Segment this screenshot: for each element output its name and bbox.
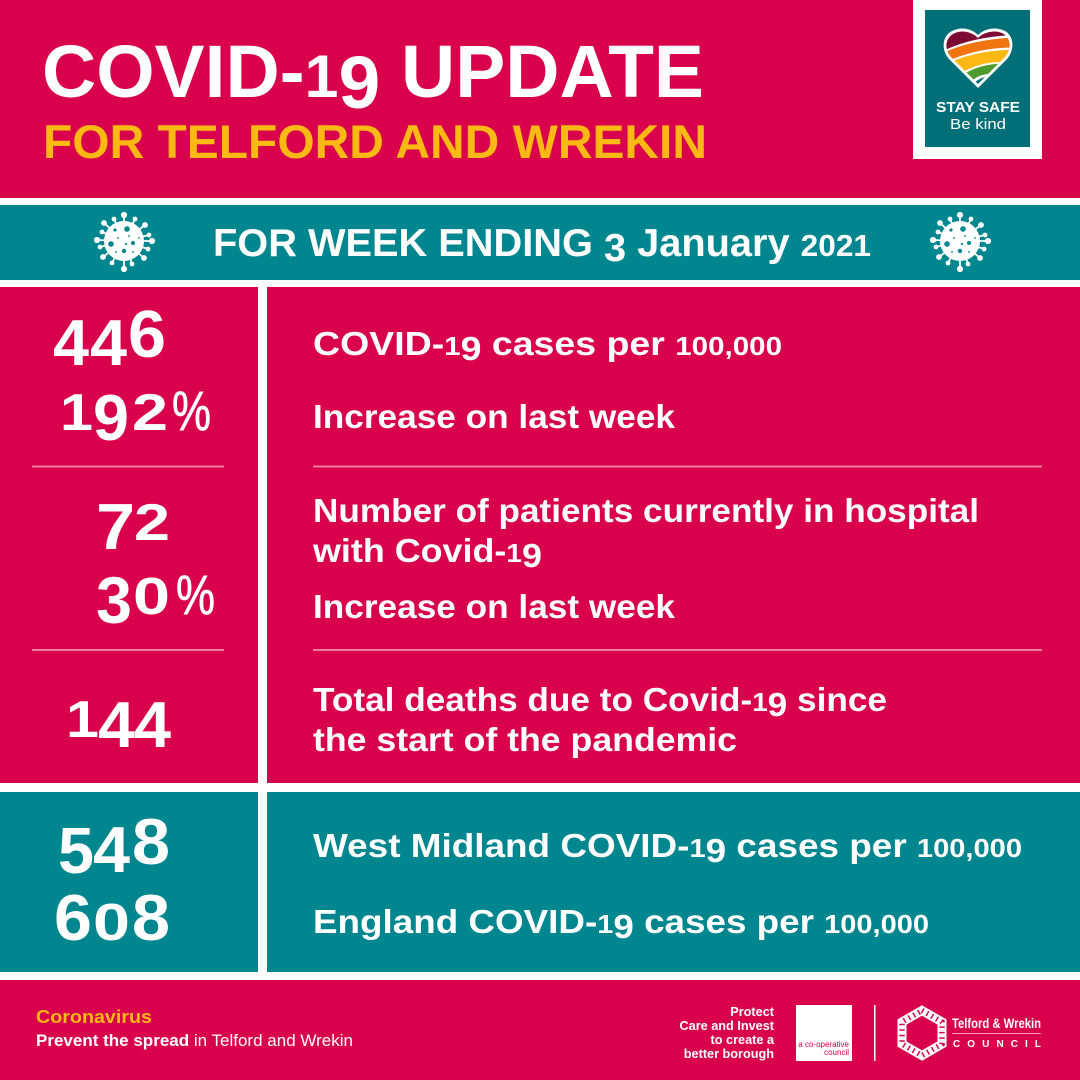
panel: week ending banner [0,205,1080,280]
label: patients in hospital: Number of patients currently in hospital [313,492,979,529]
number: 144 [66,688,171,761]
number: 446: 6 [128,297,166,372]
footer heading: coronavirus: Coronavirus [36,1007,152,1027]
icon: virus right [931,213,990,271]
number: 192%: 2 [132,384,168,442]
council name: Telford & Wrekin [952,1015,1041,1031]
label: increase on last week: Increase on last week [313,398,676,435]
icon: council hexagon [902,1010,942,1056]
panel: local figures, descriptions column [267,287,1080,783]
number: 30%: 3 [96,563,132,637]
label: west midland cases: West Midland COVID- 19 cases per 100,000 [313,827,1022,869]
label: england cases: England COVID- 19 cases per 100,000 [313,903,929,945]
number: 30%: % [176,563,215,626]
number: 192%: 9 [93,381,129,454]
number: 30%: 0 [133,568,170,626]
number: 608: 6 [54,881,92,954]
panel: header [0,0,1080,198]
footer text: prevent the spread: Prevent the spread in Telford and Wrekin [36,1032,353,1050]
label: total deaths line 1: Total deaths due to Covid- 19 since [313,681,887,723]
number: 548: 8 [132,805,170,878]
co-operative council badge: council [824,1048,849,1057]
number: 608: 8 [132,881,170,954]
number: 192%: % [172,379,211,442]
logo text: be kind: Be kind [950,116,1006,133]
panel: footer [0,980,1080,1080]
panel: comparison, descriptions column [267,792,1080,972]
logo: stay safe be kind [913,0,1042,159]
number: 144: 4 [98,688,135,761]
telford and wrekin council logo [902,1010,1041,1056]
number: 446 [53,297,166,379]
number: 446: 4 [90,306,127,379]
number: 548 [58,805,170,887]
number: 30% [96,563,215,637]
number: 192%: 1 [60,384,93,442]
co-operative council badge [796,1005,852,1061]
council word: COUNCIL [953,1039,1041,1050]
number: 608: 0 [93,894,130,952]
number: 192% [60,379,211,454]
logo text: stay safe: STAY SAFE [936,99,1020,116]
number: 72 [96,490,170,563]
icon: virus left [95,213,154,271]
number: 144: 1 [66,691,99,749]
panel: local figures, numbers column [0,287,258,783]
footer strapline: better borough [684,1047,774,1061]
subtitle: FOR TELFORD AND WREKIN [43,115,707,168]
co-operative council badge: a co-operative [798,1040,850,1049]
title: COVID-19 UPDATE [42,30,704,124]
number: 446: 4 [53,306,89,379]
number: 144: 4 [134,688,171,761]
footer strapline: Protect [730,1005,775,1019]
number: 608 [54,881,170,954]
label: with covid-19: with Covid- 19 [312,532,542,574]
footer strapline: to create a [711,1033,775,1047]
number: 72: 2 [134,494,170,552]
icon: rainbow heart [944,28,1012,88]
label: cases per 100,000: COVID- 19 cases per 100,000 [313,325,782,367]
week ending heading: FOR WEEK ENDING 3 January 2021 [213,222,871,270]
footer strapline: Care and Invest [680,1019,775,1033]
footer strapline [680,1005,775,1061]
panel: comparison, numbers column [0,792,258,972]
number: 548: 4 [93,813,130,886]
label: increase on last week: Increase on last week [313,588,676,625]
label: total deaths line 2: the start of the pandemic [313,721,737,758]
number: 548: 5 [58,814,94,887]
number: 72: 7 [96,490,135,563]
